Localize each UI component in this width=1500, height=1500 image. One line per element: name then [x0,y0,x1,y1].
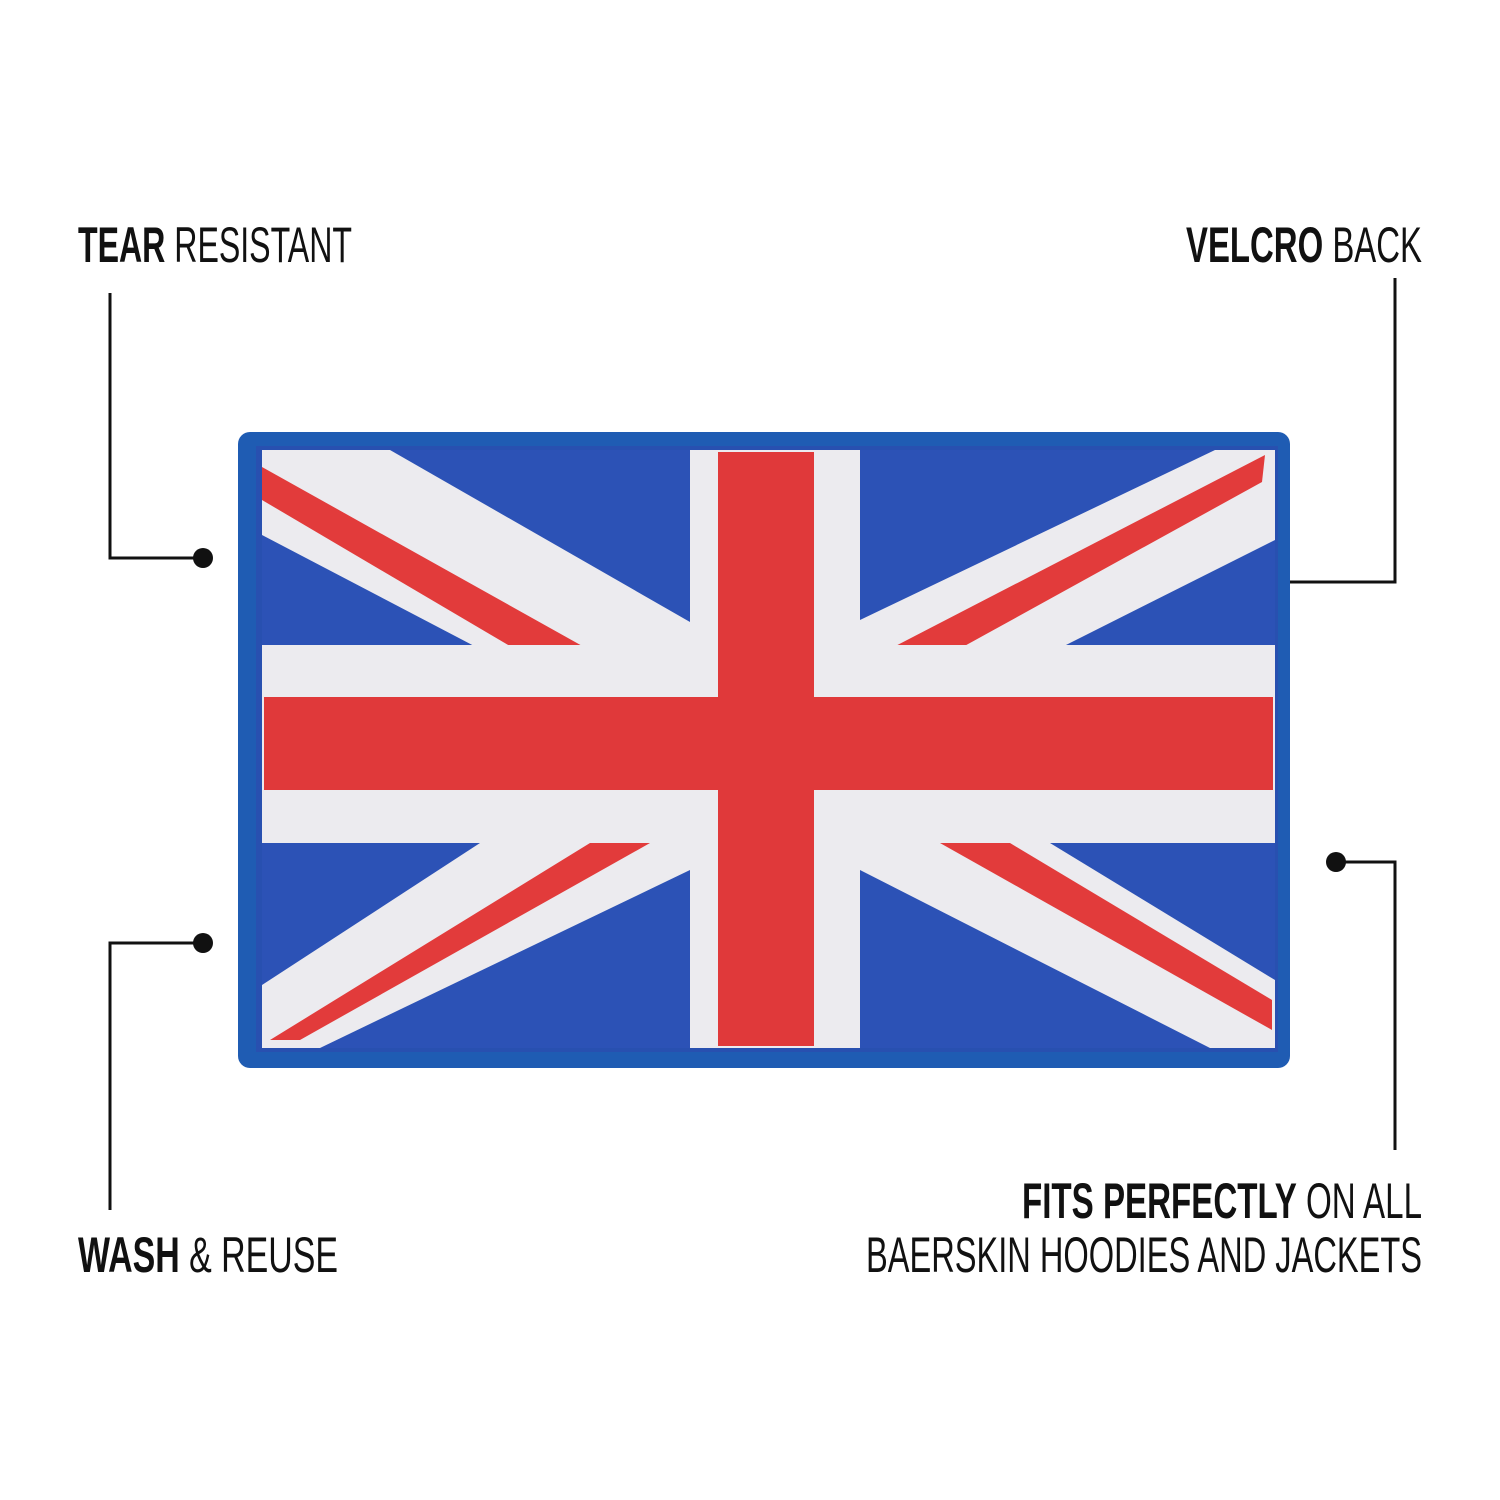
callout: fits perfectly: FITS PERFECTLY ON ALL [1022,1173,1422,1229]
callout: velcro back [1186,217,1422,582]
red cross [264,452,1273,1046]
callout: wash and reuse [78,933,338,1283]
callout: tear resistant [78,217,352,568]
white diagonals [262,450,1275,1048]
callout: tear resistant: TEAR RESISTANT [78,217,352,273]
callout: fits perfectly [866,852,1422,1283]
white cross [262,450,1275,1048]
callout: wash and reuse: WASH & REUSE [78,1227,338,1283]
red diagonals [262,455,1272,1040]
flag patch [238,432,1290,1068]
callout: velcro back: VELCRO BACK [1186,217,1422,273]
